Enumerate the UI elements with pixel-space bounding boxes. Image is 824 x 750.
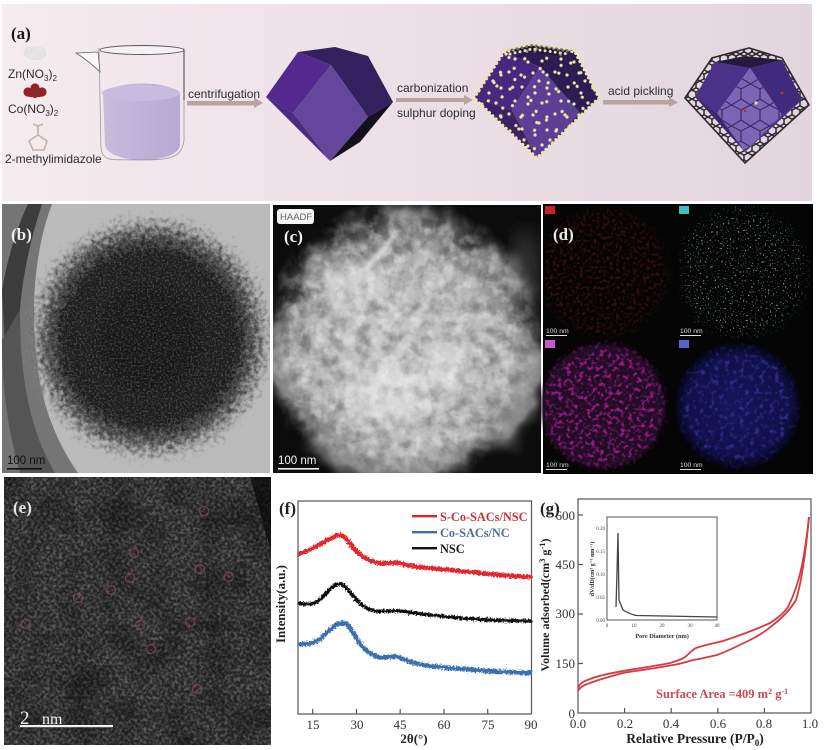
y-axis tick labels: 450: [556, 557, 575, 572]
x-axis tick labels: 30: [350, 717, 364, 732]
label Co(NO3)2: ): [50, 102, 54, 116]
chart: N2 isotherm (g): [537, 499, 818, 748]
isotherm desorption branch: [578, 517, 809, 688]
y-axis title: -1: [537, 543, 547, 550]
label Zn(NO3)2: ): [48, 67, 52, 81]
arrow: carbonization / sulphur doping: [396, 95, 473, 105]
label Zn(NO3)2: Zn(NO: [8, 67, 44, 81]
surface area annotation: -1: [781, 687, 788, 696]
bright zones: [326, 265, 467, 425]
legend: NSC: [440, 542, 465, 556]
x-axis tick labels: 0.4: [663, 716, 680, 731]
blue curve Co-SACs/NC: [298, 623, 532, 673]
label carbonization: carbonization: [397, 81, 468, 95]
y-axis title: ): [538, 539, 552, 543]
label 2-methylimidazole: 2-methylimidazole: [5, 152, 102, 166]
inset: pore size distribution: [589, 517, 720, 640]
panel label (g): (g): [540, 499, 560, 518]
surface area annotation: Surface Area =409 m: [656, 687, 768, 701]
surface area annotation: 2: [768, 687, 772, 696]
y-axis tick labels: 300: [556, 606, 575, 621]
beaker with solution: [76, 46, 184, 160]
icon: 2-methylimidazole molecule: [29, 124, 47, 150]
arrow: centrifugation: [187, 98, 263, 108]
icon: Co(NO3)2 cluster: [23, 83, 47, 98]
surface area annotation: g: [772, 687, 782, 701]
scale bar 100 nm: 100 nm: [7, 455, 45, 467]
plot frame and ticks: [298, 501, 532, 714]
map: red channel: [545, 206, 675, 338]
black curve NSC: [298, 584, 532, 621]
inset x tick labels: 40: [714, 624, 720, 629]
x-axis tick labels: 0.8: [756, 716, 772, 731]
inset y tick labels: [596, 527, 606, 624]
panel: synthesis scheme (a): [2, 4, 812, 201]
inset y tick labels: 0.15: [596, 550, 606, 555]
label Co(NO3)2: Co(NO: [8, 102, 45, 116]
map: cyan channel: [679, 206, 811, 338]
map: blue channel: [675, 340, 811, 472]
inset x tick labels: 20: [660, 624, 665, 629]
label centrifugation: centrifugation: [188, 87, 260, 101]
inset x tick labels: [606, 624, 720, 629]
inset y tick labels: 0.00: [596, 619, 606, 624]
panel label (b): (b): [11, 225, 32, 244]
label Co(NO3)2: 2: [54, 109, 59, 118]
x-axis title: ): [759, 731, 764, 746]
polyhedron in carbon mesh shell: [685, 48, 809, 163]
label Zn(NO3)2: 2: [52, 74, 57, 83]
label sulphur doping: sulphur doping: [397, 106, 476, 120]
y-axis tick labels: [556, 508, 575, 721]
plot frame and ticks: [578, 499, 811, 713]
inset y tick labels: 0.05: [596, 596, 606, 601]
y-axis title: 3: [537, 559, 547, 563]
panel label (a): (a): [11, 24, 31, 43]
x-axis tick labels: 75: [482, 717, 494, 732]
x-axis title: 0: [755, 738, 760, 748]
y-axis title: Intensity(a.u.): [273, 565, 288, 643]
chart: XRD patterns (f): [273, 499, 538, 746]
HAADF tag: [277, 209, 314, 224]
scale bar 2 nm: nm: [42, 711, 63, 728]
y-axis title: Volume adsorbed(cm: [538, 563, 552, 671]
x-axis title: Relative Pressure (P/P: [626, 731, 755, 746]
inset y title: dV/dD(cm³ g⁻¹ nm⁻¹): [589, 542, 596, 596]
x-axis tick labels: 45: [394, 717, 406, 732]
icon: Zn(NO3)2 cluster: [24, 46, 46, 60]
inset y tick labels: 0.20: [596, 527, 606, 532]
scale bars: 100 nm: [680, 328, 703, 335]
inset x tick labels: 0: [606, 624, 609, 629]
x-axis tick labels: 0.6: [710, 716, 727, 731]
x-axis tick labels: 90: [524, 717, 538, 732]
label acid pickling: acid pickling: [608, 84, 673, 98]
inset curve: [616, 533, 717, 617]
x-axis tick labels: 60: [438, 717, 450, 732]
isotherm adsorption branch: [578, 517, 809, 691]
map: magenta channel: [541, 340, 677, 472]
label Co(NO3)2: 3: [45, 109, 50, 118]
HAADF tag: HAADF: [280, 212, 312, 223]
scale bars: 100 nm: [546, 462, 569, 469]
x-axis tick labels: 1.0: [802, 716, 818, 731]
x-axis tick labels: 15: [306, 717, 320, 732]
panel: elemental mapping (d): [541, 204, 813, 474]
y-axis title: g: [538, 550, 552, 559]
legend: [412, 510, 527, 556]
scale bar 2 nm: 2: [20, 708, 30, 729]
inset x tick labels: 10: [632, 624, 637, 629]
legend: S-Co-SACs/NSC: [440, 510, 527, 524]
rhombic dodecahedron crystal: [266, 47, 393, 161]
legend: Co-SACs/NC: [440, 526, 510, 540]
y-axis tick labels: 0: [568, 706, 575, 721]
panel: TEM image (b): [2, 204, 274, 473]
panel label (c): (c): [284, 227, 303, 246]
doped polyhedron with yellow nanoparticles: [474, 44, 599, 158]
single-atom markers: [22, 506, 234, 694]
y-axis tick labels: 150: [556, 656, 575, 671]
scale bar 2 nm: [20, 708, 113, 729]
x-axis title: 2θ(°): [400, 731, 428, 746]
red curve S-Co-SACs/NSC: [298, 535, 532, 577]
x-axis tick labels: 0.2: [617, 716, 633, 731]
scale bars: 100 nm: [546, 328, 569, 335]
scale bars: [546, 328, 703, 470]
x-axis tick labels: 0.0: [570, 716, 586, 731]
panel label (d): (d): [553, 225, 574, 244]
label Zn(NO3)2: 3: [44, 74, 49, 83]
inset x tick labels: 30: [688, 624, 693, 629]
scale bar 100 nm: 100 nm: [278, 455, 316, 467]
x-axis tick labels: [570, 716, 818, 731]
panel: HAADF image (c): [273, 205, 541, 473]
inset x title: Pore Diameter (nm): [635, 633, 689, 640]
y-axis tick labels: 600: [556, 508, 575, 523]
panel: HAADF-STEM atomic image (e): [4, 477, 271, 745]
inset y tick labels: 0.10: [596, 573, 606, 578]
arrow: acid pickling: [603, 97, 678, 107]
panel label (f): (f): [279, 499, 296, 518]
panel label (e): (e): [13, 498, 32, 517]
x-axis tick labels: [306, 717, 538, 732]
scale bars: 100 nm: [680, 462, 703, 469]
